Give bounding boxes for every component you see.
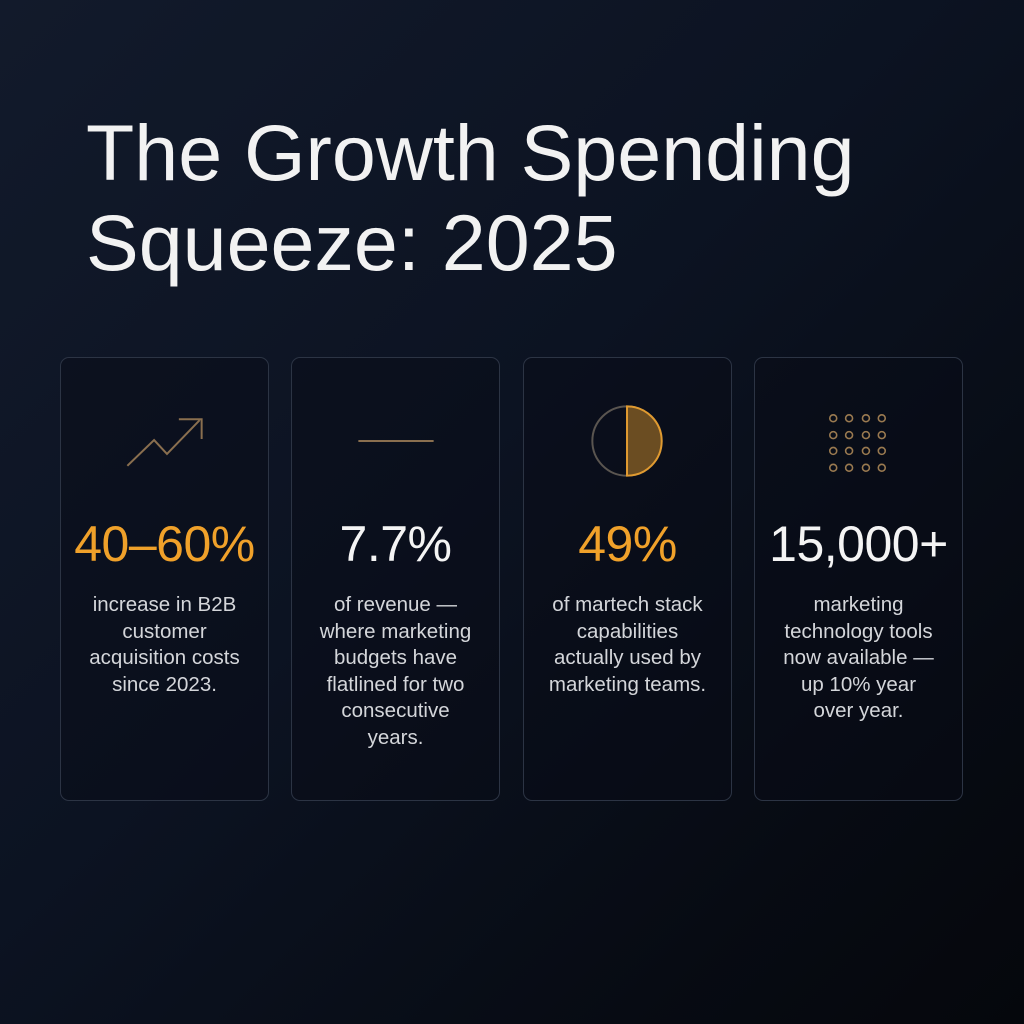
text: technology tools xyxy=(784,620,933,642)
icon: flat line xyxy=(358,440,434,442)
stat: 7.7% xyxy=(340,516,451,572)
icon: half circle xyxy=(591,405,663,477)
title xyxy=(86,108,855,287)
text: increase in B2B customer acquisition costs since 2023. xyxy=(89,593,240,696)
text: now available — xyxy=(783,646,934,669)
panel: CAC increase xyxy=(60,357,269,801)
text: up 10% year xyxy=(801,672,916,696)
stat: 15,000+ xyxy=(769,516,948,572)
text: marketing xyxy=(813,593,904,616)
text: over year. xyxy=(813,699,904,722)
stat: 40–60% xyxy=(74,516,255,572)
stat: 49% xyxy=(578,516,677,572)
icon: dot grid xyxy=(829,414,886,472)
title: The Growth Spending xyxy=(86,108,855,197)
panel: martech usage xyxy=(523,357,732,801)
icon: trend arrow xyxy=(126,418,203,466)
title: Squeeze: 2025 xyxy=(86,198,618,287)
text xyxy=(783,593,934,722)
panel: budgets xyxy=(291,357,500,801)
panel: tools xyxy=(754,357,963,801)
text: of martech stack capabilities actually used by marketing teams. xyxy=(549,593,706,696)
text: of revenue — where marketing budgets have flatlined for two consecutive years. xyxy=(320,593,471,748)
